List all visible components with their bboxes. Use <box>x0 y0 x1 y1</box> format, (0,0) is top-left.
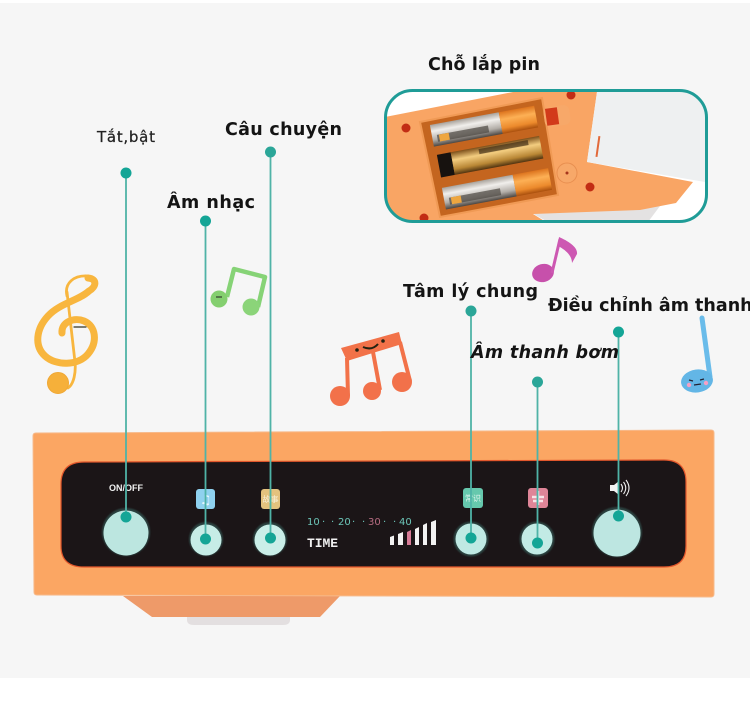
white battery lid <box>587 92 705 182</box>
screw boss <box>557 163 577 183</box>
icon: blue note <box>680 318 714 395</box>
icon: speaker <box>610 480 629 496</box>
mounting holes <box>402 90 594 222</box>
panel: toy device <box>33 430 714 625</box>
panel: battery compartment photo <box>385 90 707 222</box>
callout: pump sound <box>532 376 543 548</box>
teal frame <box>386 90 706 222</box>
icon: story key: 故事 <box>262 494 278 505</box>
callout: on/off <box>120 168 132 522</box>
button: music <box>189 522 223 556</box>
icon: treble clef <box>38 276 95 394</box>
timer numbers: 30 <box>368 517 381 528</box>
callout lines and dots <box>120 146 624 548</box>
icon: story key <box>261 489 280 509</box>
black control panel <box>61 460 686 567</box>
speaker base <box>187 616 290 625</box>
time label: TIME <box>307 536 338 551</box>
timer numbers: · <box>331 517 334 528</box>
timer numbers: · <box>352 517 355 528</box>
icon: music key <box>196 489 215 509</box>
label: music: Âm nhạc <box>167 191 255 213</box>
icon: knowledge key: 常识 <box>465 493 481 504</box>
icon: pump key <box>528 488 548 508</box>
orange body <box>33 430 714 597</box>
label: on/off: Tắt,bật <box>96 128 155 146</box>
timer numbers: 20 <box>338 517 351 528</box>
button: general knowledge <box>454 522 488 556</box>
battery middle <box>437 136 543 177</box>
label: story: Câu chuyện <box>225 120 342 140</box>
icon: pink note <box>530 237 577 285</box>
button: volume <box>592 507 642 557</box>
signal bars <box>390 520 436 545</box>
icon: knowledge key <box>463 488 483 508</box>
label: pump sound: Âm thanh bơm <box>469 341 619 363</box>
on/off text: ON/OFF <box>109 483 143 493</box>
timer numbers: 10 <box>307 517 320 528</box>
battery bay <box>420 98 558 217</box>
label: volume: Điều chỉnh âm thanh <box>548 295 750 316</box>
battery bottom <box>442 168 552 209</box>
icon: coral note <box>330 332 412 406</box>
timer numbers: 40 <box>399 517 412 528</box>
icon: music key: ♫ <box>200 493 211 508</box>
heading: battery slot: Chỗ lắp pin <box>428 53 540 75</box>
callout: general knowledge <box>466 306 476 544</box>
icon: green note <box>210 269 265 316</box>
callout: music <box>200 216 211 544</box>
timer numbers: · <box>322 517 325 528</box>
timer numbers: · <box>393 517 396 528</box>
battery top <box>430 106 538 147</box>
button: pump sound <box>520 522 554 556</box>
timer numbers: · <box>383 517 386 528</box>
timer numbers <box>307 517 412 528</box>
orange toy body <box>385 92 693 222</box>
side switch <box>544 107 560 126</box>
callout: story <box>265 146 276 544</box>
lid latch <box>595 136 600 157</box>
label: general knowledge: Tâm lý chung <box>403 282 538 302</box>
callout: volume <box>613 326 624 522</box>
button: on/off <box>102 508 150 556</box>
timer numbers: · <box>362 517 365 528</box>
lower trapezoid <box>123 596 340 617</box>
speaker edge below the toy <box>534 206 660 220</box>
button: story <box>253 522 287 556</box>
